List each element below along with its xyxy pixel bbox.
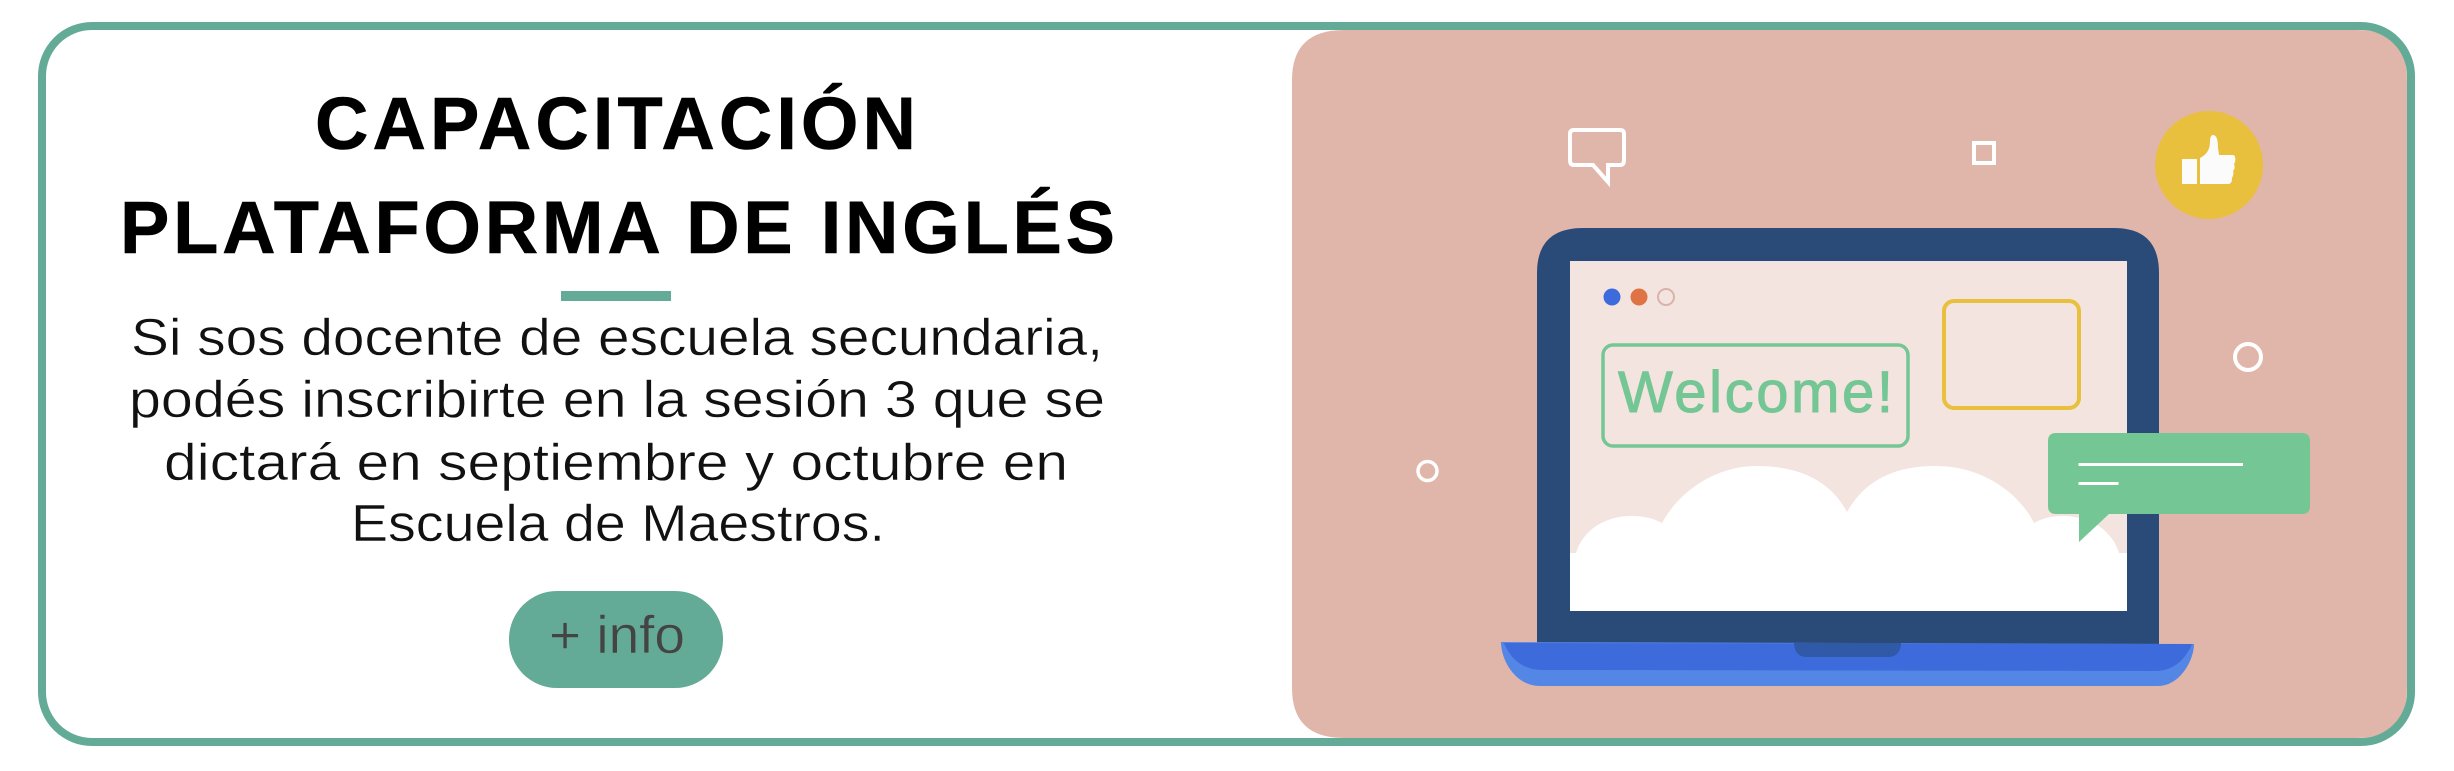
laptop base: [1501, 642, 2194, 686]
text block: description: dictará en septiembre y octubre en: [164, 434, 1068, 492]
welcome box: [1603, 345, 1908, 446]
panel: pink illustration background: [1292, 30, 2407, 738]
divider: [561, 291, 671, 301]
window dots: [1604, 288, 1674, 306]
button: + info: + info: [549, 606, 685, 665]
button: + info: [509, 591, 723, 688]
icon: thumbs up badge: [2155, 111, 2263, 219]
cloud: [1570, 466, 2127, 611]
illustration: laptop: [1501, 228, 2194, 686]
icon: chat bubble outline: [1570, 130, 1624, 182]
title: PLATAFORMA DE INGLÉS: [120, 186, 1115, 269]
laptop base top: [1504, 643, 2192, 671]
title: [120, 82, 1115, 269]
yellow box: [1944, 301, 2079, 408]
laptop lid: [1537, 228, 2159, 645]
text block: description: podés inscribirte en la sesión 3 que se: [129, 371, 1105, 429]
text block: description: [129, 309, 1105, 553]
speech bubble: [2048, 433, 2310, 542]
welcome box: Welcome!: [1618, 360, 1893, 425]
icon: small square: [1974, 143, 1994, 163]
laptop screen: [1570, 261, 2127, 611]
text block: description: Escuela de Maestros.: [351, 495, 885, 553]
icon: left small circle: [1418, 462, 1437, 480]
title: CAPACITACIÓN: [315, 82, 916, 165]
icon: right small circle: [2235, 344, 2261, 370]
text block: description: Si sos docente de escuela secundaria,: [131, 309, 1103, 367]
laptop notch: [1794, 643, 1901, 657]
